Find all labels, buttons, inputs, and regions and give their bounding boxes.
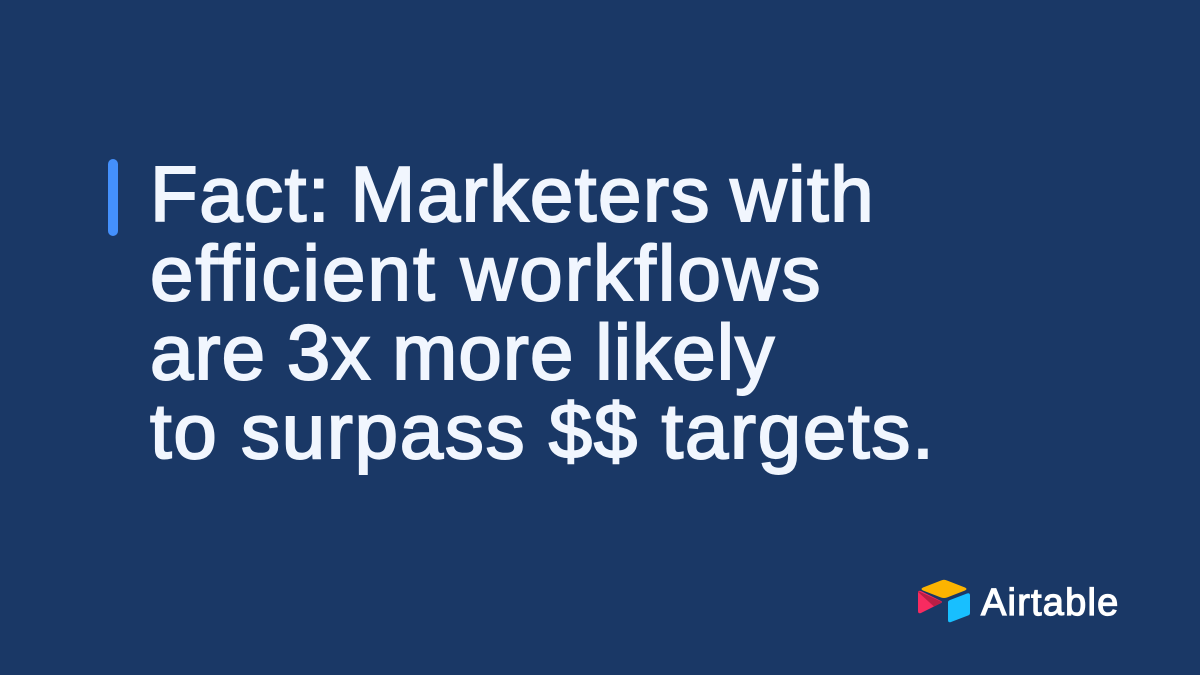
wordmark: Airtable [981, 582, 1119, 624]
headline: to surpass $$ targets. [150, 387, 936, 475]
headline: Fact: Marketers with [150, 150, 875, 238]
headline: are 3x more likely [150, 308, 775, 396]
icon: Airtable box [918, 580, 970, 622]
headline [150, 150, 936, 475]
logo: Airtable [918, 580, 1119, 624]
accent bar [108, 159, 118, 236]
headline: efficient workflows [150, 229, 823, 317]
